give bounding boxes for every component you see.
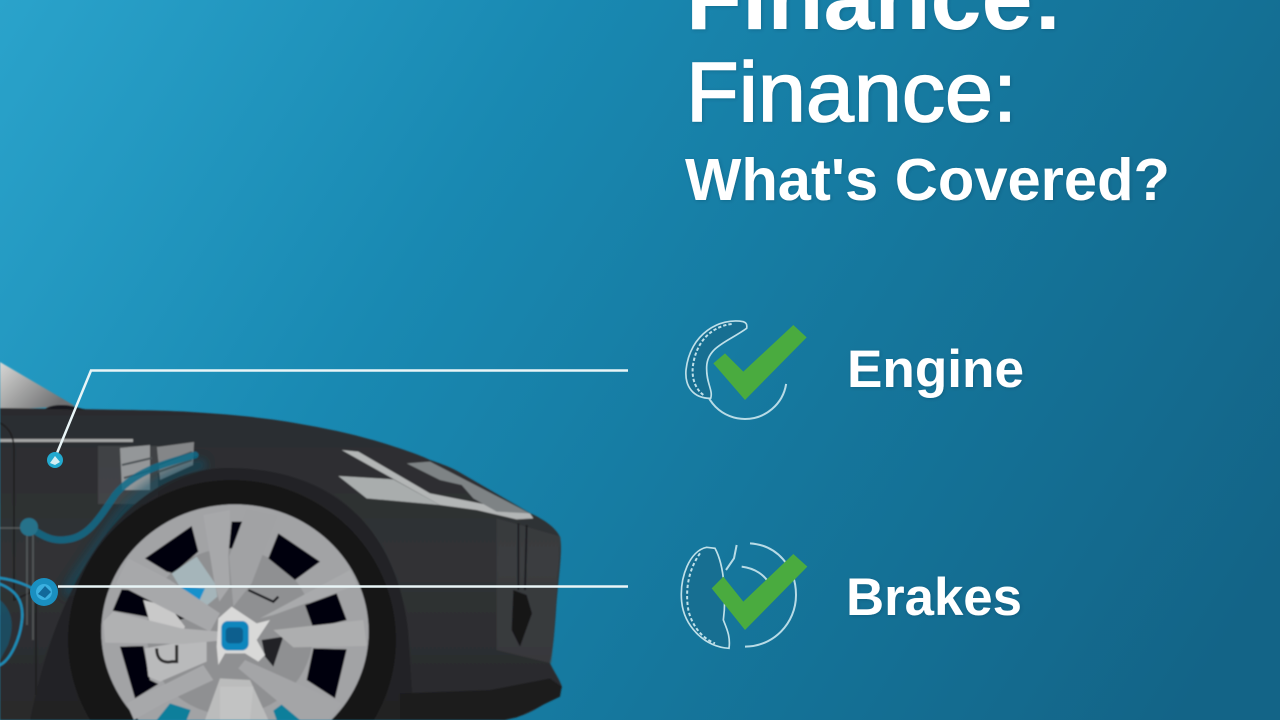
label: Engine: Engine bbox=[847, 340, 1024, 399]
dark wheel openings bbox=[113, 522, 347, 698]
title bbox=[685, 0, 1170, 213]
panel seam bbox=[518, 523, 527, 590]
headlight bbox=[407, 462, 530, 513]
callout: engine leader line bbox=[47, 370, 628, 468]
brake disc bbox=[147, 548, 313, 715]
car illustration bbox=[0, 362, 562, 720]
spokes bbox=[103, 509, 367, 720]
windshield bbox=[0, 362, 75, 410]
alloy wheel bbox=[101, 504, 369, 720]
tire bbox=[68, 480, 396, 720]
front lip bbox=[400, 678, 562, 720]
car body bbox=[0, 408, 562, 720]
title line: Finance: Finance: bbox=[686, 45, 1017, 139]
icon: brake part with checkmark bbox=[681, 543, 807, 648]
sensor texture panels bbox=[120, 442, 194, 490]
lower hood reflection bbox=[338, 476, 440, 505]
coverage item: engine bbox=[686, 321, 1024, 419]
door seam and side highlight bbox=[0, 423, 158, 695]
mirror bbox=[45, 405, 87, 410]
label: Brakes: Brakes bbox=[846, 568, 1022, 627]
callout node: engine bbox=[47, 452, 63, 468]
icon: engine part with checkmark bbox=[686, 321, 807, 419]
front panel sheen bbox=[497, 518, 561, 663]
front fascia bbox=[338, 450, 562, 720]
brake caliper details bbox=[143, 557, 283, 682]
blue wiring bbox=[0, 455, 200, 665]
callout: brakes leader line bbox=[30, 578, 628, 606]
intake notch bbox=[512, 590, 532, 647]
fender highlight bbox=[342, 450, 533, 519]
teal openings at the wheel base bbox=[157, 696, 313, 720]
center hub bbox=[217, 607, 270, 665]
wire junction bbox=[20, 518, 38, 536]
callout node: brakes bbox=[30, 578, 58, 606]
rim bbox=[101, 504, 369, 720]
coverage item: brakes bbox=[681, 543, 1022, 648]
wheel arch bbox=[30, 468, 414, 720]
subtitle: What's Covered? bbox=[685, 147, 1170, 213]
